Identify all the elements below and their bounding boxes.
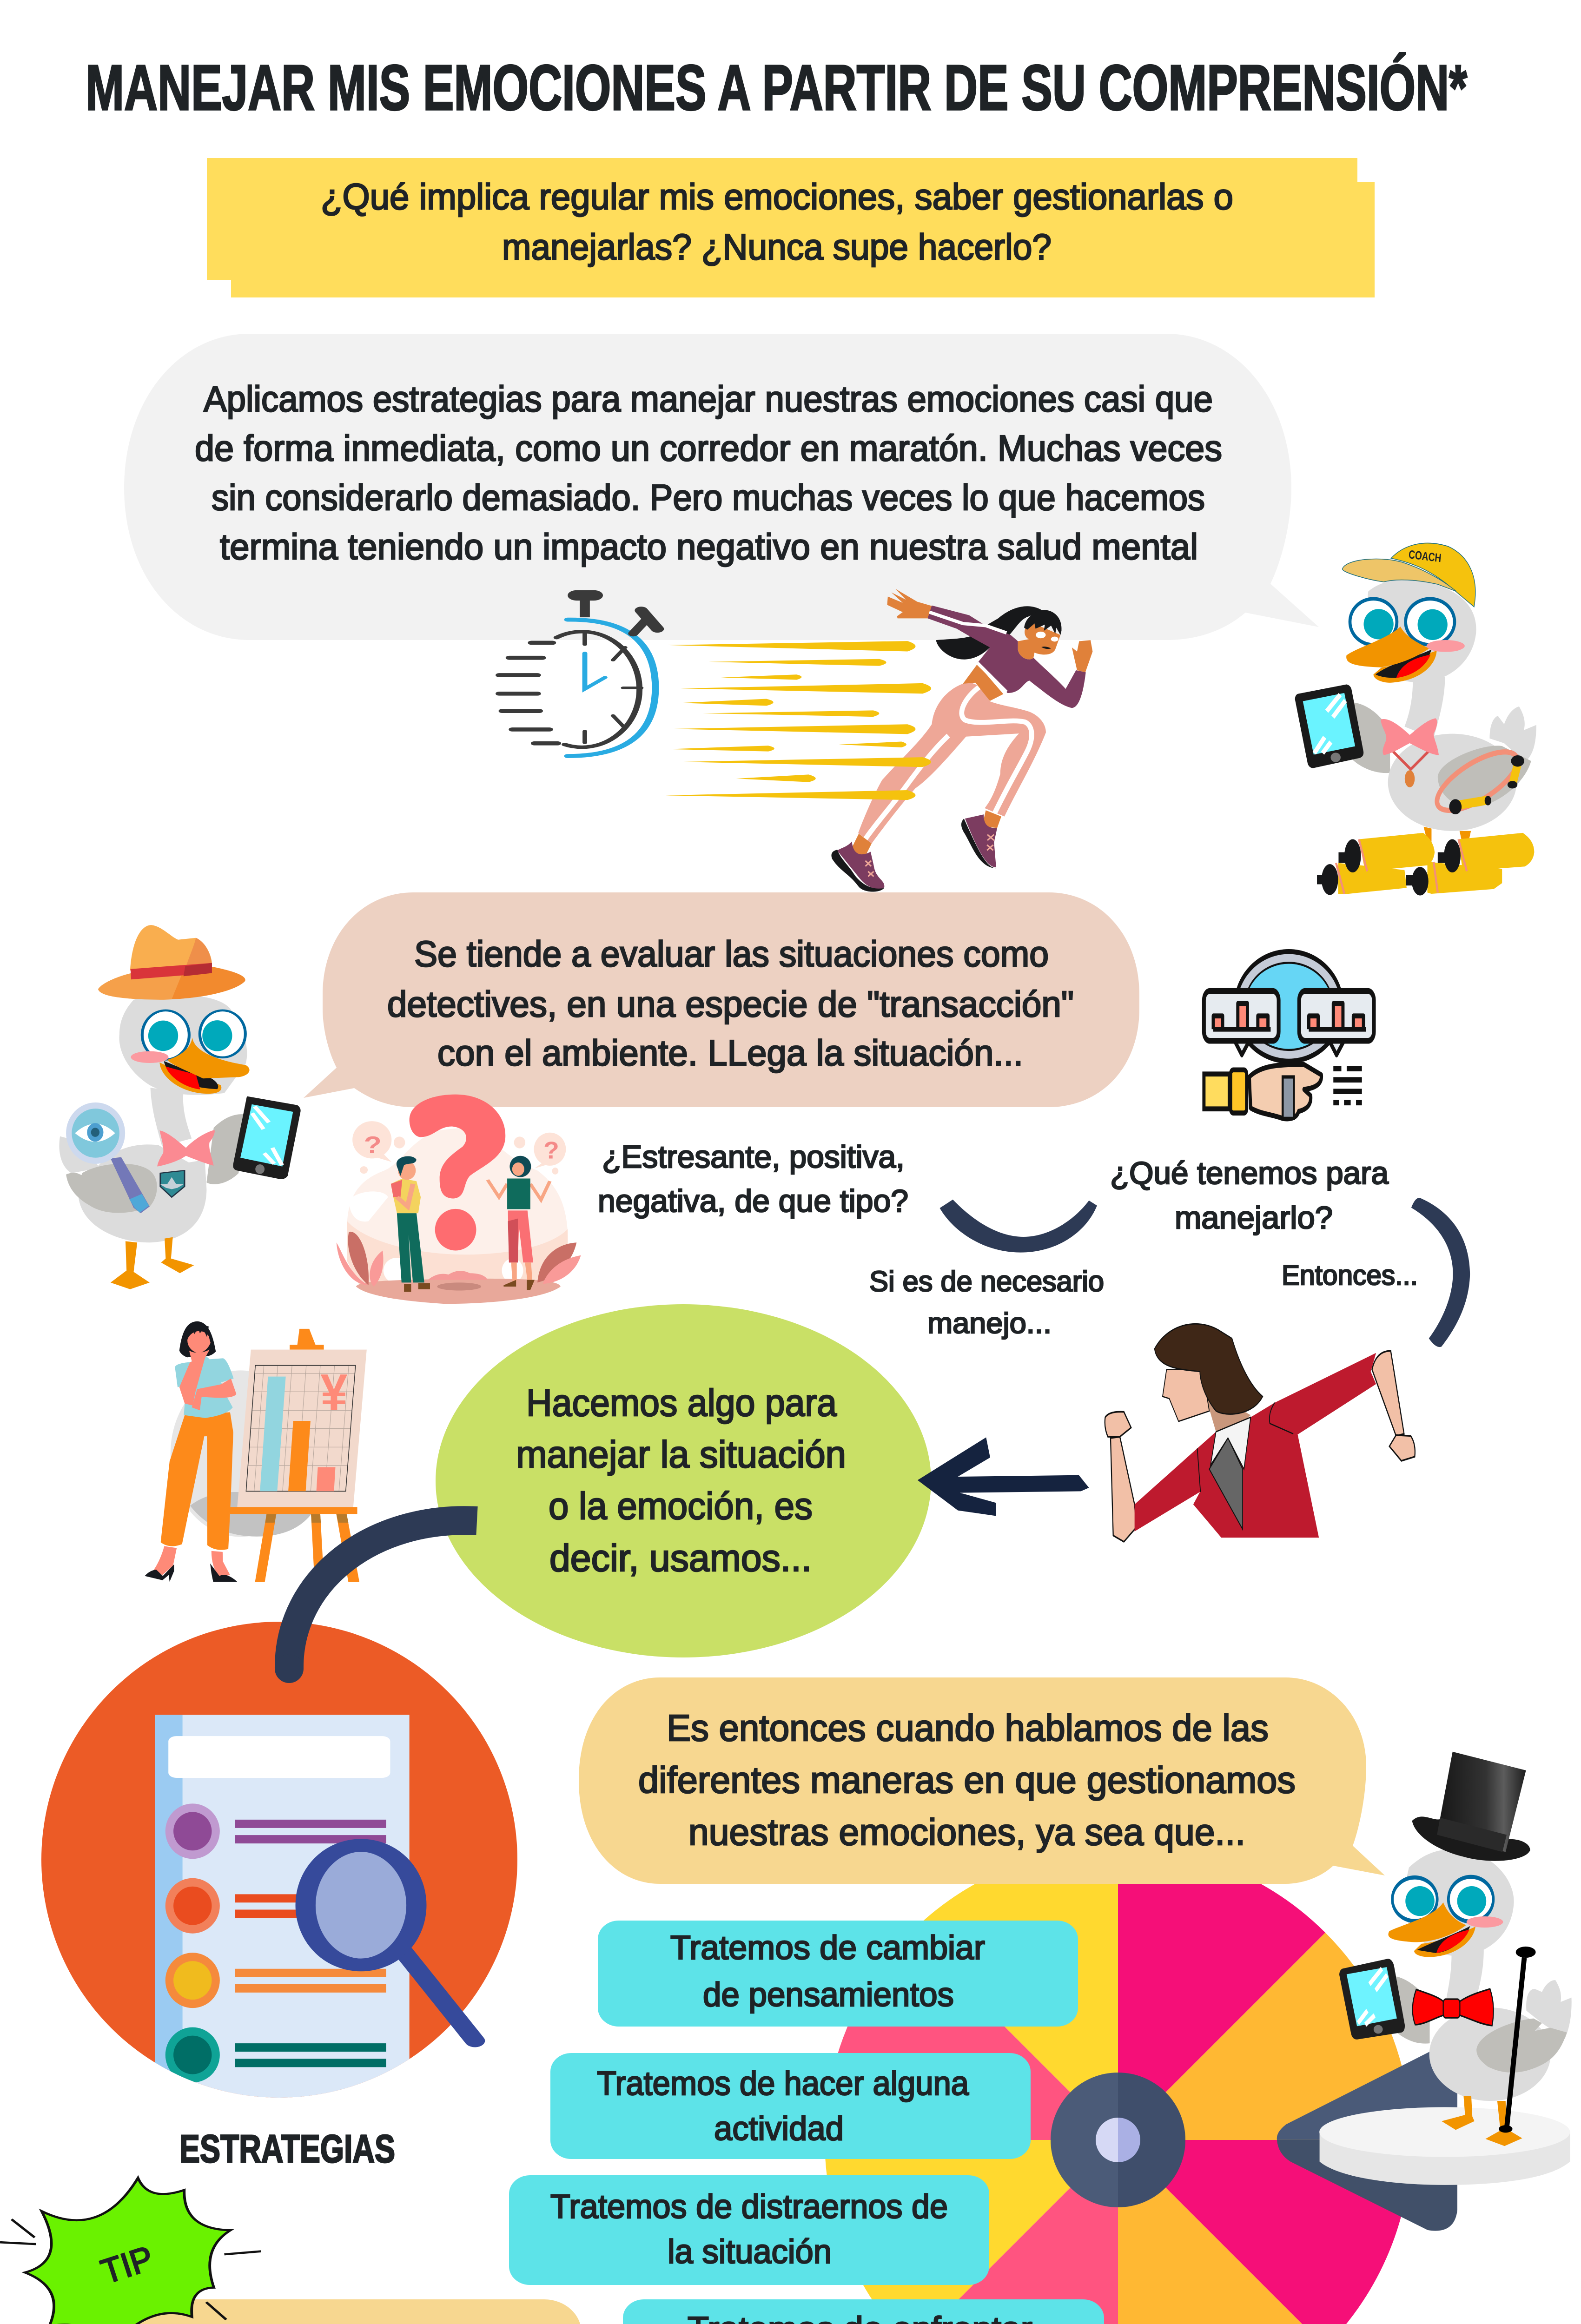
box text: Tratemos de cambiar: [670, 1929, 985, 1967]
banner background: [207, 158, 1375, 297]
box text: [670, 1929, 985, 2014]
bubble text: diferentes maneras en que gestionamos: [638, 1759, 1296, 1801]
bubble text: sin considerarlo demasiado. Pero muchas veces lo que hacemos: [212, 477, 1205, 518]
oval text: Hacemos algo para: [526, 1382, 837, 1424]
text: stressful question: negativa, de que tipo?: [598, 1183, 908, 1219]
box shape: [509, 2175, 989, 2285]
icon: tip burst: [0, 2178, 261, 2324]
bubble text: Se tiende a evaluar las situaciones como: [414, 933, 1049, 974]
illustration: detective duck: [59, 925, 301, 1289]
box text: Tratemos de hacer alguna: [597, 2065, 969, 2102]
burst label: TIP: [96, 2238, 158, 2291]
box shape: [623, 2299, 1104, 2324]
bubble shape: [579, 1677, 1385, 1884]
bubble text: [638, 1707, 1296, 1853]
oval text: decir, usamos...: [549, 1537, 812, 1579]
small question marks: [364, 1131, 559, 1163]
box text: [597, 2065, 969, 2147]
illustration: question mark with people: [337, 1095, 581, 1304]
small question marks: ?: [543, 1137, 559, 1163]
box shape: [598, 1921, 1078, 2027]
oval text: [516, 1382, 846, 1579]
bubble text: Es entonces cuando hablamos de las: [667, 1707, 1269, 1749]
bubble text: [387, 933, 1074, 1073]
option box: confront: [623, 2299, 1104, 2324]
option box: do activity: [550, 2053, 1031, 2159]
text: then: Entonces...: [1282, 1260, 1418, 1291]
wheel hub: [1051, 2073, 1118, 2207]
text: what we have: manejarlo?: [1175, 1200, 1333, 1235]
box shape: [550, 2053, 1031, 2159]
magnifying glass: [305, 1845, 475, 2041]
bubble text: de forma inmediata, como un corredor en maratón. Muchas veces: [195, 428, 1222, 469]
burst accent lines: [0, 2219, 261, 2320]
platform: [1320, 2131, 1570, 2185]
document: [155, 1715, 410, 2107]
panel: tip text: [122, 2299, 582, 2324]
arrow curve: right: [1411, 1198, 1470, 1347]
panel: question banner: [207, 158, 1375, 297]
dark pointer: [1277, 2050, 1457, 2231]
arrow: towards oval: [918, 1437, 1089, 1516]
illustration: coach duck: [1295, 543, 1536, 896]
banner text: ¿Qué implica regular mis emociones, saber gestionarlas o: [321, 176, 1233, 217]
text: stressful question: ¿Estresante, positiva,: [602, 1139, 905, 1175]
panel: speech bubble ways: [579, 1677, 1385, 1884]
box text: la situación: [668, 2233, 832, 2271]
panel: strategies circle: [41, 1622, 517, 2107]
oval text: o la emoción, es: [549, 1485, 813, 1527]
text: if management needed: manejo...: [927, 1307, 1052, 1340]
bubble text: nuestras emociones, ya sea que...: [688, 1811, 1245, 1853]
icon: magnifier with charts: [1204, 951, 1374, 1119]
box text: actividad: [714, 2110, 844, 2147]
illustration: presenter with chart: [145, 1321, 367, 1582]
front speed streaks: [666, 757, 931, 800]
bubble text: termina teniendo un impacto negativo en nuestra salud mental: [220, 526, 1198, 567]
small question marks: ?: [364, 1131, 382, 1158]
illustration: person in red jacket: [1105, 1324, 1415, 1542]
option box: distract: [509, 2175, 989, 2285]
banner text: manejarlas? ¿Nunca supe hacerlo?: [502, 226, 1052, 267]
big question mark: [410, 1095, 505, 1199]
yen sign: ¥: [320, 1363, 348, 1421]
panel: speech bubble marathon: [124, 334, 1319, 640]
bubble text: detectives, en una especie de "transacción": [387, 984, 1074, 1024]
orange circle: [41, 1622, 517, 2098]
arrow curve: to strategies: [275, 1520, 477, 1683]
text: if management needed: [869, 1266, 1104, 1340]
panel: speech bubble detectives: [304, 892, 1139, 1107]
panel: green oval: [436, 1304, 931, 1657]
cap label: COACH: [1408, 548, 1442, 565]
text: what we have: [1110, 1155, 1389, 1235]
oval shape: [436, 1304, 931, 1657]
box text: Tratemos de distraernos de: [550, 2188, 948, 2225]
wheel segments: [1118, 1847, 1325, 2140]
text: what we have: ¿Qué tenemos para: [1110, 1155, 1389, 1191]
arrow curve: smile: [940, 1200, 1097, 1253]
text: if management needed: Si es de necesario: [869, 1266, 1104, 1298]
bubble text: con el ambiente. LLega la situación...: [437, 1032, 1023, 1073]
bubble text: Aplicamos estrategias para manejar nuestras emociones casi que: [204, 378, 1213, 419]
speed streaks: [668, 641, 931, 752]
illustration: runner: [831, 589, 1092, 892]
bubble shape: [124, 334, 1319, 640]
box text: [550, 2188, 948, 2271]
heading: strategies: ESTRATEGIAS: [179, 2127, 395, 2171]
option box: change thoughts: [598, 1921, 1078, 2027]
banner text: [321, 176, 1233, 267]
bubble shape: [304, 892, 1139, 1107]
chart: spinning wheel: [825, 1847, 1457, 2324]
burst shape: [25, 2178, 231, 2324]
tip box: [122, 2299, 582, 2324]
illustration: top hat duck on platform: [1319, 1752, 1572, 2185]
oval text: manejar la situación: [516, 1433, 846, 1476]
box text: de pensamientos: [703, 1976, 954, 2014]
icon: stopwatch: [499, 595, 657, 756]
text: stressful question: [598, 1139, 908, 1219]
bubble text: [195, 378, 1222, 567]
